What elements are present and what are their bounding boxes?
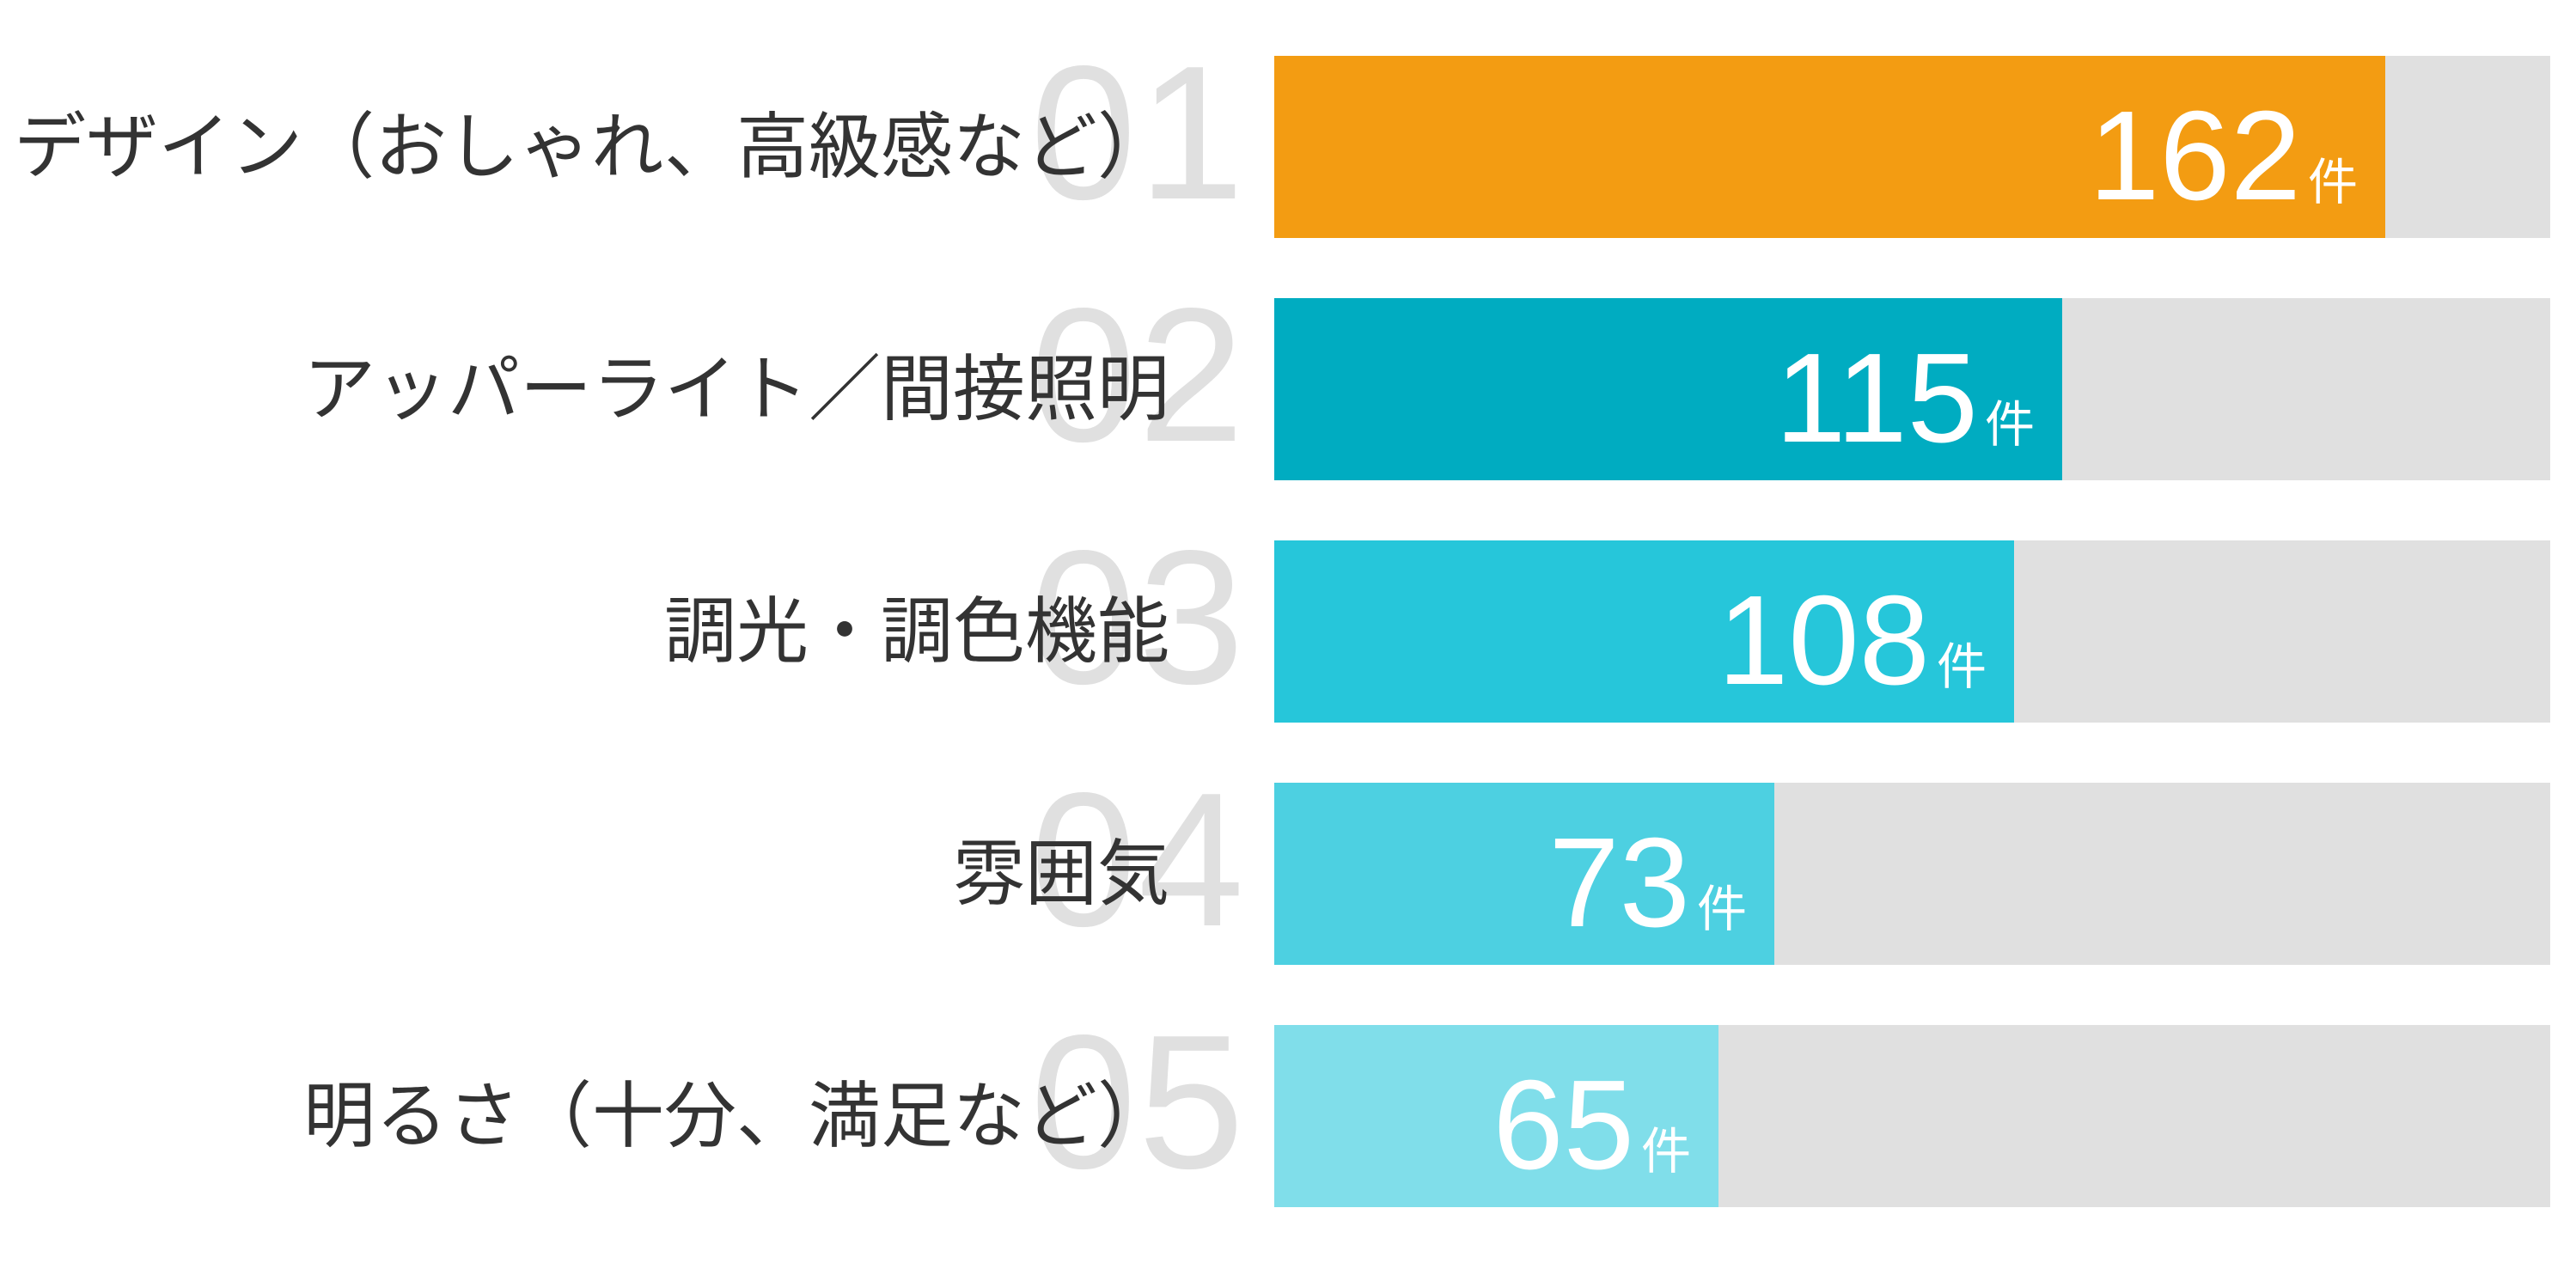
label: design: デザイン（おしゃれ、高級感など） (14, 107, 1169, 187)
bar 1: 162件 (2089, 85, 2358, 227)
label: brightness: 明るさ（十分、満足など） (303, 1076, 1169, 1156)
bar 4: 73件 (1548, 812, 1747, 954)
bar 3 (1274, 540, 2550, 723)
row 4 (953, 754, 2550, 967)
rank number 01: 01 (1030, 27, 1246, 240)
rank number 04: 04 (1030, 754, 1246, 967)
rank number 03: 03 (1030, 511, 1246, 724)
label: atmosphere: 雰囲気 (953, 833, 1169, 914)
row 5 (303, 996, 2550, 1209)
rank number 05: 05 (1030, 996, 1246, 1209)
row 3 (664, 511, 2550, 724)
label: dimming: 調光・調色機能 (664, 591, 1169, 672)
bar 2 (1274, 298, 2550, 480)
bar 3: 108件 (1718, 570, 1987, 711)
label: uplight: アッパーライト／間接照明 (303, 349, 1169, 430)
bar 5 (1274, 1025, 2550, 1207)
bar 2: 115件 (1775, 327, 2035, 469)
bar 5: 65件 (1492, 1054, 1691, 1196)
row 2 (303, 269, 2550, 482)
bar 1 (1274, 56, 2550, 238)
bar 4 (1274, 783, 2550, 965)
row 1 (14, 27, 2550, 240)
rank number 02: 02 (1030, 269, 1246, 482)
